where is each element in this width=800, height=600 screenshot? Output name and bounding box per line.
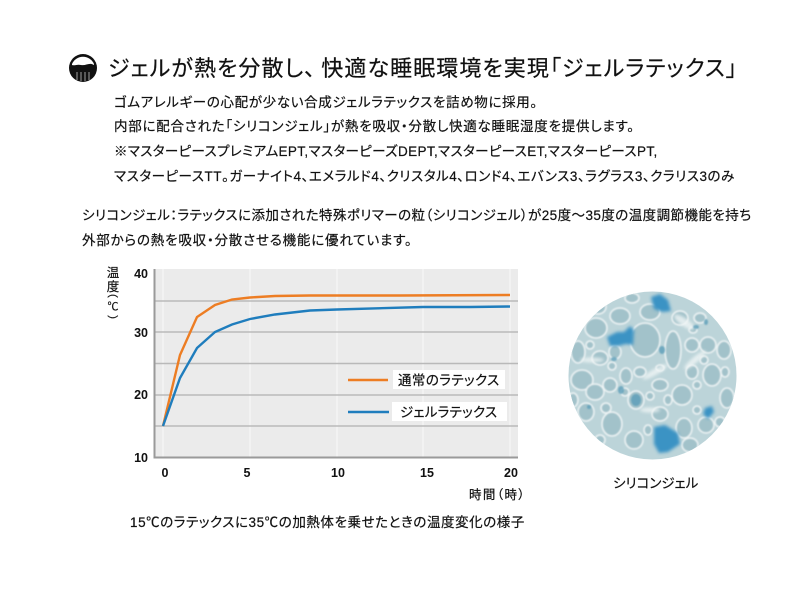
text block: description: 内部に配合された「シリコンジェル」が熱を吸収・分散し快適な睡眠湿度を提供します。 [114,119,635,134]
y axis title: 温 [107,266,120,280]
text block: silicone gel definition [82,208,751,248]
y axis title [106,266,120,321]
legend: standard latex: 通常のラテックス [398,373,500,388]
illustration: silicone gel micrograph [568,292,736,489]
y axis labels: 20 [134,388,148,402]
text block: description: ゴムアレルギーの心配が少ない合成ジェルラテックスを詰め物に採用。 [114,95,538,110]
plot background [154,269,518,457]
y axis labels [134,267,148,465]
legend: gel latex [348,402,507,421]
x axis labels: 15 [420,466,434,480]
title: ジェルが熱を分散し、快適な睡眠環境を実現「ジェルラテックス」 [108,56,738,81]
text block: description: マスターピースTT。ガーナイト4、エメラルド4、クリスタル4、ロンド4、エバンス3、ラグラス3、クラリス3のみ [114,169,735,184]
y axis title: ℃ [108,301,118,313]
x axis title: 時間（時） [469,488,526,502]
blue curve: gel latex [163,306,510,426]
text block: description: ※マスターピースプレミアムEPT,マスターピーズDEPT,マスターピースET,マスターピースPT, [114,144,658,159]
y axis title: 度 [107,279,119,294]
legend: standard latex [348,370,505,389]
text block: silicone gel definition: 外部からの熱を吸収・分散させる機能に優れています。 [82,233,412,248]
x axis labels: 0 [162,466,169,480]
orange curve: standard latex [163,295,510,426]
y axis title: （ [106,292,119,298]
x axis labels: 5 [244,466,251,480]
text block: silicone gel definition: シリコンジェル：ラテックスに添加された特殊ポリマーの粒（シリコンジェル）が25度～35度の温度調節機能を持ち [82,208,751,223]
text block: description [114,95,735,184]
legend: gel latex: ジェルラテックス [400,405,497,420]
y axis labels: 10 [134,451,148,465]
y axis title: ） [106,315,119,321]
micrograph label: シリコンジェル [613,476,698,491]
x axis labels: 20 [504,466,518,480]
y axis labels: 30 [134,326,148,340]
x axis labels: 10 [331,466,345,480]
chart caption: 15℃のラテックスに35℃の加熱体を乗せたときの温度変化の様子 [130,515,525,530]
y axis labels: 40 [134,267,148,281]
x axis labels [162,466,518,480]
